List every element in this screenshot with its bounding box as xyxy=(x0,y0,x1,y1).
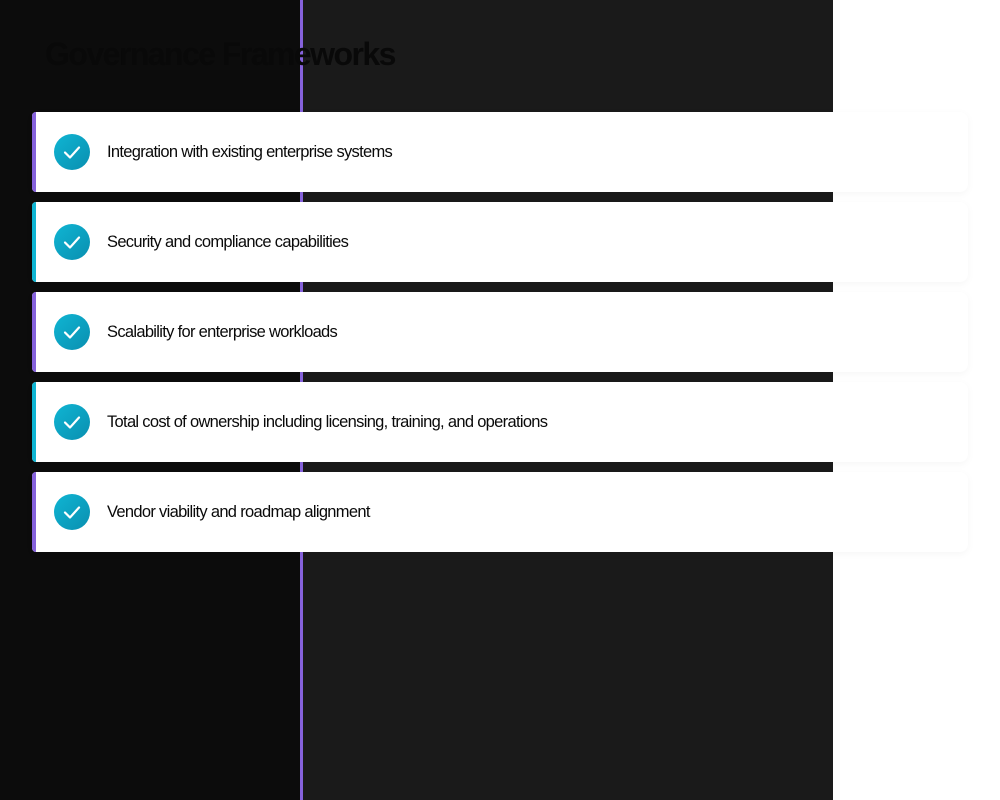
card: total cost: Total cost of ownership including licensing, training, and operations xyxy=(107,413,547,431)
card: scalability xyxy=(32,292,968,372)
background: left dark panel xyxy=(0,0,300,800)
card: integration: Integration with existing enterprise systems xyxy=(107,143,392,161)
purple vertical line xyxy=(300,0,303,800)
card: total cost xyxy=(32,382,968,462)
card: security xyxy=(32,202,968,282)
card: integration xyxy=(32,112,968,192)
card: security: Security and compliance capabilities xyxy=(107,233,348,251)
card: vendor: Vendor viability and roadmap alignment xyxy=(107,503,370,521)
card: scalability: Scalability for enterprise workloads xyxy=(107,323,337,341)
card: vendor xyxy=(32,472,968,552)
title: Governance Frameworks xyxy=(45,36,395,72)
background: center dark panel xyxy=(303,0,833,800)
